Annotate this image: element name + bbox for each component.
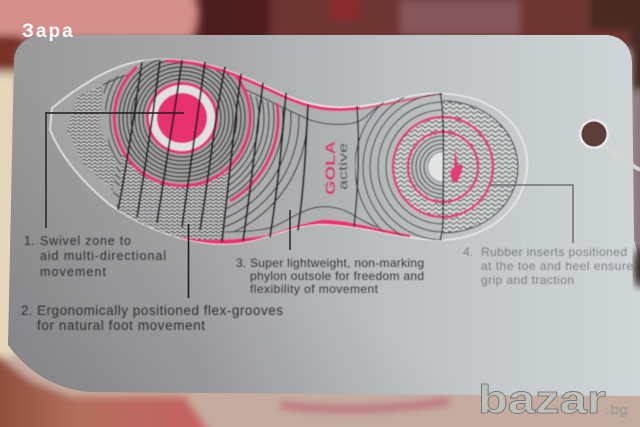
caption 3: phylon outsole: Super lightweight, non-marking	[250, 256, 424, 270]
caption 3: phylon outsole: flexibility of movement	[250, 282, 379, 296]
caption 1: swivel zone: Swivel zone to	[40, 234, 131, 248]
caption 3: phylon outsole: phylon outsole for freedom and	[250, 269, 424, 283]
watermark logo: bazar.bg	[478, 378, 628, 422]
callout line 1	[46, 113, 184, 228]
watermark logo: bazar.bg: .bg	[606, 402, 628, 417]
heel pink rings	[393, 117, 493, 217]
watermark label: Зара: Зара	[22, 21, 75, 42]
midfoot arc grooves	[103, 74, 306, 232]
caption 4: rubber inserts	[463, 245, 633, 287]
GOLA active logo: GOLA	[322, 141, 338, 195]
finger shadow at right edge	[634, 248, 640, 288]
heel left concentric grooves	[354, 93, 444, 241]
forefoot pink arcs	[114, 67, 278, 201]
forefoot gray disc	[124, 59, 248, 185]
caption 1: swivel zone	[24, 234, 166, 279]
heel hatch inner left	[393, 117, 443, 217]
caption 3: phylon outsole: 3.	[236, 256, 246, 270]
caption 2: flex-grooves	[21, 303, 283, 333]
callout line 3	[289, 210, 291, 250]
caption 4: rubber inserts: 4.	[463, 245, 473, 259]
caption 1: swivel zone: movement	[40, 265, 107, 279]
callout line 2	[188, 224, 190, 298]
grooved forefoot hatch	[67, 85, 117, 190]
GOLA active logo	[322, 141, 350, 195]
sole outline	[50, 59, 527, 244]
top and bottom pink edge bands	[165, 61, 440, 242]
caption 4: rubber inserts: grip and traction	[481, 273, 574, 287]
swivel target disc	[146, 82, 218, 154]
callout line 4	[491, 185, 573, 243]
caption 4: rubber inserts: Rubber inserts positioned	[481, 245, 627, 259]
punched hole with string	[579, 119, 640, 170]
heel wave tread	[442, 100, 520, 234]
grooved flex hatch	[118, 150, 229, 240]
forefoot concentric grooves	[119, 55, 245, 181]
sole inner guide lines	[103, 69, 384, 232]
caption 2: flex-grooves: Ergonomically positioned flex-grooves	[37, 303, 283, 318]
heel centre mark	[450, 148, 463, 183]
caption 1: swivel zone: 1.	[24, 234, 34, 248]
caption 2: flex-grooves: for natural foot movement	[37, 318, 205, 333]
heel inner white half disc	[428, 152, 443, 182]
sole diagram	[48, 58, 528, 246]
caption 4: rubber inserts: at the toe and heel ensure	[481, 259, 633, 273]
watermark logo: bazar.bg: bazar	[478, 378, 606, 422]
caption 2: flex-grooves: 2.	[21, 303, 32, 318]
caption 1: swivel zone: aid multi-directional	[40, 249, 166, 263]
caption 3: phylon outsole	[236, 256, 424, 296]
flex groove lines	[118, 60, 443, 242]
GOLA active logo: active	[336, 143, 350, 190]
